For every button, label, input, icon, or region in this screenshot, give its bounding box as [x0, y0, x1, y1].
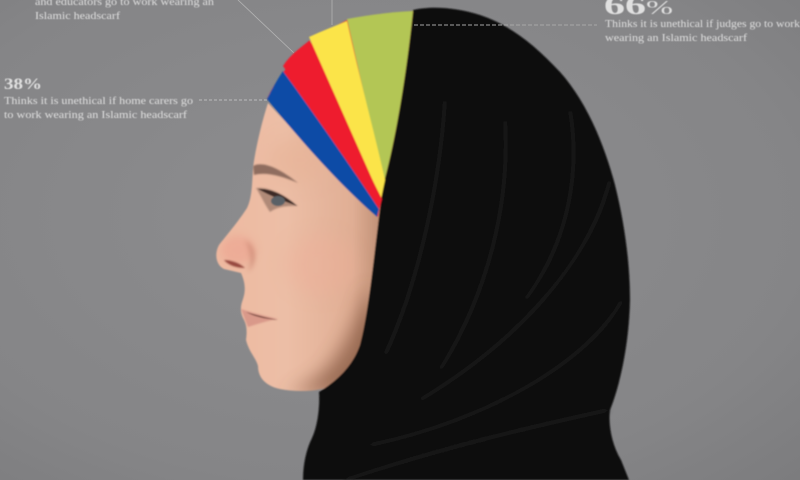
- leader line: vertical top: [331, 0, 333, 25]
- leader line: 66% callout: [414, 24, 597, 26]
- leader line: 38% callout: [199, 99, 270, 101]
- callout: top-left partial text: [35, 0, 215, 22]
- callout: 38% home carers: [4, 76, 193, 121]
- headband: green stripe: [347, 11, 413, 182]
- callout: 66% judges: wearing an Islamic headscarf: [605, 33, 748, 44]
- nostril: [224, 260, 245, 268]
- face: [216, 102, 383, 392]
- leader line: diagonal: [238, 0, 294, 53]
- callout: 66% judges: [604, 0, 800, 44]
- callout: 38% home carers: 38%: [4, 76, 42, 93]
- jaw and neck shadow: [290, 288, 372, 392]
- hijab: [303, 8, 630, 480]
- headband base: [267, 11, 413, 217]
- callout: 38% home carers: to work wearing an Islamic headscarf: [4, 110, 188, 121]
- eyebrow: [253, 164, 298, 183]
- callout: top-left partial text: Islamic headscarf: [35, 11, 121, 22]
- forehead shading: [284, 152, 292, 170]
- headband: blue stripe: [267, 71, 379, 217]
- callout: 66% judges: Thinks it is unethical if judges go to work: [605, 19, 800, 30]
- eye: [256, 188, 298, 212]
- cheek warmth: [286, 235, 354, 295]
- headband: red stripe: [283, 40, 382, 210]
- callout: 38% home carers: Thinks it is unethical if home carers go: [4, 96, 193, 107]
- headband: yellow stripe: [309, 21, 385, 199]
- hijab folds: [345, 100, 622, 480]
- lips: [241, 309, 278, 327]
- nose side shadow: [246, 242, 256, 270]
- portrait: [210, 8, 630, 480]
- nose shading: [222, 236, 250, 264]
